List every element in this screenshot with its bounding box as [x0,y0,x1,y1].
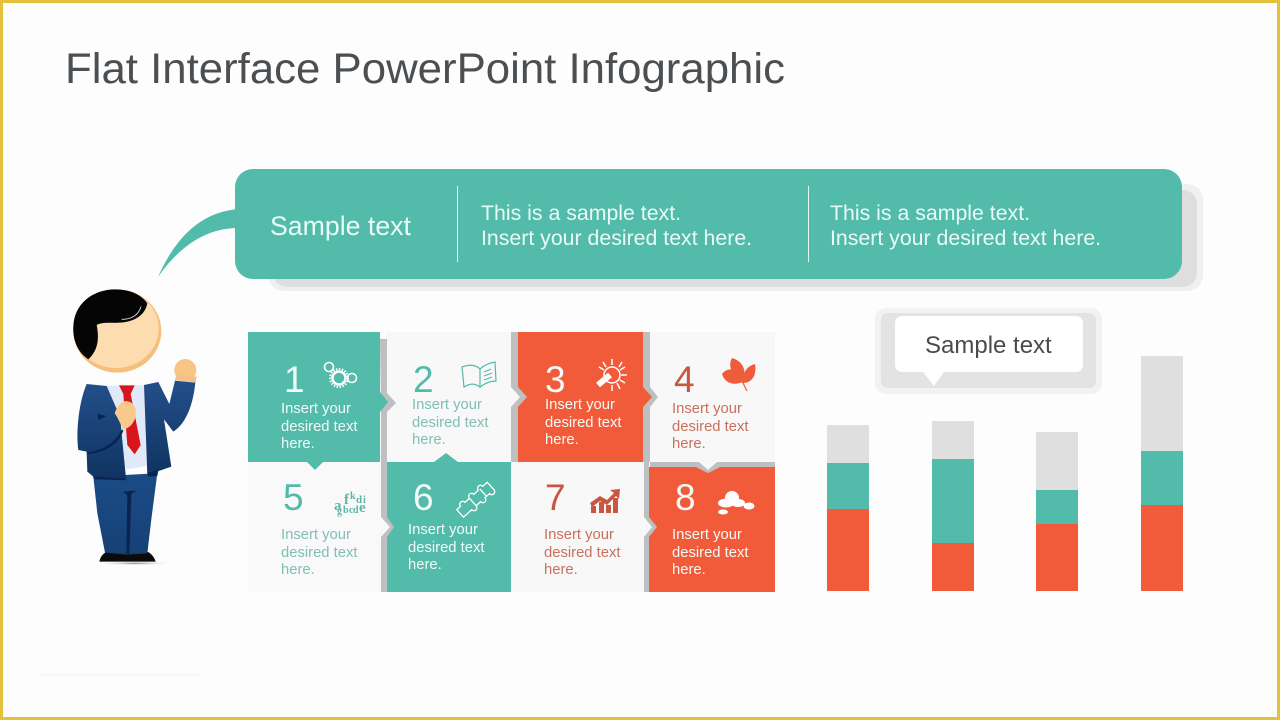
icon: alphabet cluster: d [353,505,359,516]
panel: cell 3 [511,332,652,462]
text: Insert your [672,527,742,543]
panel: cell 5 [281,477,366,578]
number: 8 [675,477,696,518]
icon: alphabet cluster: k [350,491,356,502]
number: 5 [283,477,304,518]
number: 7 [545,477,566,518]
speech tail [158,209,238,277]
text: Insert your [672,401,742,417]
bar 2 [932,421,974,591]
bar 1 [827,425,869,591]
icon: alphabet cluster: e [359,500,366,516]
title: Flat Interface PowerPoint Infographic [65,45,785,93]
shirt [107,385,147,469]
jacket right and raised arm [144,381,195,475]
banner body [235,169,1182,279]
icon: leaves [722,358,755,391]
icon: growth chart [590,489,620,513]
icon: businessman character [73,289,197,565]
inbound arrows [644,462,720,537]
text: here. [281,562,315,578]
jacket left [77,384,126,478]
hair [73,289,147,359]
icon: alphabet cluster: f [344,492,350,508]
cell 5 background [248,462,382,592]
icon: alphabet cluster: d [356,494,362,506]
text: here. [281,436,315,452]
banner text 2: Insert your desired text here. [830,226,1101,250]
bar 4 [1141,356,1183,591]
cell 4 background [649,332,775,462]
panel: tooltip callout [875,308,1102,394]
text: desired text [544,545,620,561]
hair highlight [122,307,141,319]
panel: cell 6 [381,453,511,592]
cell shape [518,332,652,462]
cell 7 background [511,462,645,592]
icon: gears [324,362,356,387]
icon: alphabet cluster: c [349,505,354,516]
separators [380,332,775,592]
icon: idea bulb [598,359,627,391]
number: 3 [545,359,566,400]
text: desired text [281,545,358,561]
text: desired text [408,540,484,556]
tooltip label: Sample text [925,332,1052,359]
banner text 1: Insert your desired text here. [481,226,752,250]
banner heading: Sample text [270,211,412,241]
banner text 1: This is a sample text. [481,201,681,225]
icon: alphabet cluster [334,491,366,517]
text: here. [544,562,578,578]
icon: alphabet cluster: b [343,505,349,516]
text: here. [412,432,446,448]
text: Insert your [408,522,478,538]
cell shape [248,332,388,470]
panel: cell 7 [544,477,620,578]
banner text 2: This is a sample text. [830,201,1030,225]
divider 2 [808,186,809,262]
cell shape [387,453,511,592]
icon: alphabet cluster: a [334,498,342,514]
text: desired text [545,415,622,431]
jacket details [87,414,158,480]
icon: alphabet cluster: i [363,495,366,506]
text: desired text [281,419,358,435]
icon: clouds [718,491,754,514]
trouser crease [123,491,137,554]
divider 1 [457,186,458,262]
chest hand [115,401,136,429]
inbound arrow [381,517,394,537]
number: 2 [413,359,434,400]
panel: cell 1 [248,332,388,470]
stacked bar chart [827,356,1183,591]
text: here. [408,557,442,573]
tooltip shadow [875,308,1102,394]
bar 3 [1036,432,1078,591]
trousers [93,473,157,555]
text: Insert your [412,397,482,413]
text: desired text [672,545,748,561]
inbound arrow [511,387,527,407]
text: desired text [672,419,748,435]
panel: cell 4 [672,358,755,452]
cell shape [649,467,775,592]
panel: numbered grid [248,332,775,592]
text: here. [545,432,579,448]
text: desired text [412,415,488,431]
number: 1 [284,359,305,400]
banner shadow [268,184,1203,291]
text: here. [672,436,706,452]
text: Insert your [281,401,351,417]
head [73,289,161,373]
icon: puzzle pieces [455,480,496,519]
shoes [99,551,156,562]
text: Insert your [545,397,615,413]
ground shadow [95,561,175,565]
tie [119,385,141,454]
number: 4 [674,359,695,400]
panel: top speech banner [158,169,1203,291]
number: 6 [413,477,434,518]
text: Insert your [281,527,351,543]
cell 2 background [386,332,512,462]
panel: cell 8 [644,462,775,592]
text: here. [672,562,706,578]
icon: open book [462,362,496,387]
icon: alphabet cluster: g [337,506,342,517]
text: Insert your [544,527,614,543]
raised hand [174,359,197,383]
tooltip box [895,316,1083,386]
panel: cell 2 [412,359,496,448]
